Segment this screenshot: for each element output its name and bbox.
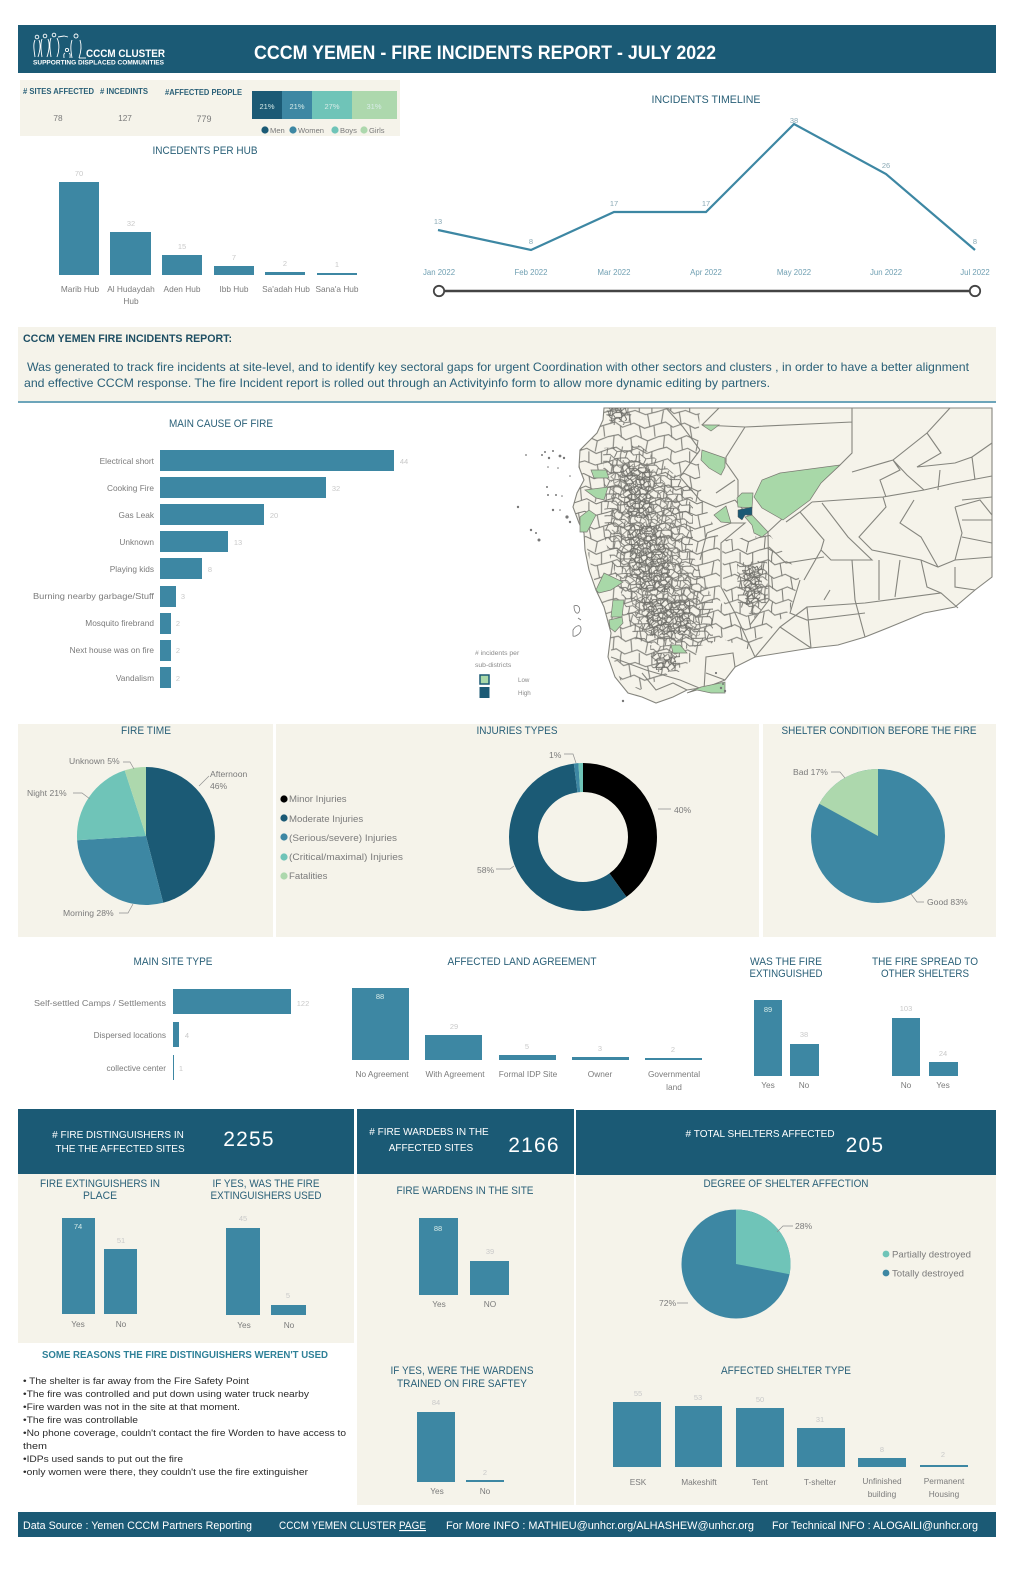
bar chart: affected land agreement: Owner	[588, 1069, 612, 1079]
dense western and central districts	[603, 408, 768, 672]
bar chart: affected shelter type: 53	[694, 1393, 702, 1402]
bar chart: main cause of fire: MAIN CAUSE OF FIRE	[169, 418, 273, 430]
panel: shelters affected	[576, 1110, 996, 1505]
KPI: incidents	[100, 87, 148, 123]
KPI: sites affected	[23, 87, 94, 123]
bar chart: incidents per hub: Sana'a Hub	[315, 284, 359, 294]
pie chart: degree of shelter affection: 72%	[659, 1298, 677, 1308]
bar chart: main cause of fire: Next house was on fire	[70, 645, 154, 655]
bar chart: wardens trained on fire safety: 2	[483, 1468, 487, 1477]
text block: reasons extinguishers were not used: •No phone coverage, couldn't contact the fire Worden to have access to	[23, 1428, 346, 1439]
line chart: incidents timeline: Jul 2022	[960, 268, 990, 277]
bar chart: affected land agreement: 3	[598, 1044, 602, 1053]
bar chart: affected land agreement: With Agreement	[425, 1069, 485, 1079]
bar chart: wardens trained on fire safety: No	[480, 1486, 491, 1496]
donut labels: 40%	[674, 805, 692, 815]
text block: reasons extinguishers were not used: •The fire was controlled and put down using water truck nearby	[23, 1389, 309, 1400]
bar chart: affected land agreement	[352, 956, 702, 1092]
bar chart: affected land agreement: 5	[525, 1042, 529, 1051]
KPI: incidents: # INCEDINTS	[100, 87, 148, 96]
KPI banner: fire extinguishers: 2255	[223, 1128, 275, 1151]
bar chart: incidents per hub: 2	[283, 259, 287, 268]
bar chart: affected shelter type: 55	[634, 1389, 642, 1398]
KPI banner: fire wardens	[357, 1109, 574, 1174]
bar chart: incidents per hub: INCEDENTS PER HUB	[152, 145, 258, 157]
map legend	[475, 650, 531, 698]
very dense highland core	[606, 408, 762, 670]
bar chart: main cause of fire: Playing kids	[110, 564, 154, 574]
bar chart: main cause of fire: 3	[181, 592, 185, 601]
bar chart: affected shelter type	[613, 1365, 968, 1499]
donut chart: injury types	[524, 778, 642, 896]
bar chart: fire extinguishers in place: Yes	[71, 1319, 85, 1329]
bar chart: affected shelter type: Unfinished	[862, 1476, 902, 1486]
bar chart: affected shelter type: Permanent	[924, 1476, 965, 1486]
bar chart: extinguishers used: 5	[286, 1291, 290, 1300]
KPI banner: fire extinguishers	[18, 1109, 354, 1174]
stacked bar: gender and age split: 27%	[324, 102, 340, 111]
KPI banner: fire wardens: AFFECTED SITES	[389, 1143, 474, 1154]
bar chart: incidents per hub: Sa'adah Hub	[262, 284, 310, 294]
bar chart: main cause of fire: 44	[400, 457, 408, 466]
KPI banner: total shelters affected	[576, 1110, 996, 1175]
map legend: High	[518, 690, 531, 697]
date range slider	[434, 286, 980, 296]
bar chart: main site type	[34, 956, 309, 1080]
bar chart: incidents per hub: 7	[232, 253, 236, 262]
text block: reasons extinguishers were not used: •IDPs used sands to put out the fire	[23, 1454, 183, 1465]
bar chart: extinguishers used: IF YES, WAS THE FIRE	[212, 1178, 320, 1190]
panel: shelter condition pie: SHELTER CONDITION BEFORE THE FIRE	[782, 725, 976, 737]
bar chart: fire wardens in the site	[396, 1185, 534, 1309]
bar chart: wardens trained on fire safety	[390, 1365, 534, 1496]
pie chart: shelter condition	[811, 769, 945, 903]
KPI: affected people: #AFFECTED PEOPLE	[165, 88, 242, 97]
bar chart: incidents per hub: 70	[75, 169, 83, 178]
legend: injury types: (Critical/maximal) Injuries	[289, 852, 403, 863]
legend: injury types: Minor Injuries	[289, 794, 347, 805]
pie chart: degree of shelter affection: DEGREE OF SHELTER AFFECTION	[704, 1178, 868, 1190]
legend: gender and age: Boys	[340, 126, 357, 135]
map legend: Low	[518, 677, 530, 684]
pie labels: Night 21%	[27, 788, 67, 798]
bar chart: main cause of fire: Vandalism	[116, 673, 154, 683]
line chart: incidents timeline: 38	[790, 116, 798, 125]
bar chart: affected land agreement: No Agreement	[355, 1069, 409, 1079]
high incidence sub-district	[738, 507, 752, 520]
map legend: # incidents per	[475, 650, 520, 657]
footer: CCCM YEMEN CLUSTER PAGE	[279, 1520, 426, 1532]
bar chart: extinguishers used: Yes	[237, 1320, 251, 1330]
bar chart: fire extinguishers in place: 51	[117, 1236, 125, 1245]
legend: injury types	[280, 794, 403, 882]
bar chart: fire extinguishers in place: No	[116, 1319, 127, 1329]
bar chart: was the fire extinguished: Yes	[761, 1080, 775, 1090]
bar chart: fire spread to other shelters: THE FIRE SPREAD TO	[872, 956, 978, 968]
bar chart: was the fire extinguished: No	[799, 1080, 810, 1090]
bar chart: incidents per hub	[59, 145, 359, 306]
KPI: incidents: 127	[118, 113, 132, 123]
panel: injuries types donut	[276, 724, 759, 937]
text block: reasons extinguishers were not used: •Fire warden was not in the site at that moment.	[23, 1402, 240, 1413]
legend: shelter affection: Totally destroyed	[892, 1268, 964, 1280]
bar chart: main site type: collective center	[106, 1063, 166, 1073]
bar chart: wardens trained on fire safety: Yes	[430, 1486, 444, 1496]
bar chart: extinguishers used	[210, 1178, 322, 1330]
bar chart: main site type: 4	[185, 1031, 189, 1040]
panel: key figures	[20, 80, 400, 136]
bar chart: affected land agreement: AFFECTED LAND AGREEMENT	[448, 956, 597, 968]
line chart: incidents timeline: May 2022	[777, 268, 811, 277]
bar chart: main cause of fire: Burning nearby garbage/Stuff	[33, 591, 155, 601]
bar chart: wardens trained on fire safety: IF YES, WERE THE WARDENS	[390, 1365, 534, 1377]
panel: fire time pie: FIRE TIME	[121, 725, 171, 737]
bar chart: main cause of fire: Gas Leak	[118, 510, 155, 520]
line chart: incidents timeline: 8	[529, 237, 533, 246]
second dense layer	[610, 460, 762, 645]
bar chart: main site type: 1	[179, 1064, 183, 1073]
bar chart: was the fire extinguished: 89	[764, 1005, 772, 1014]
bar chart: main site type: MAIN SITE TYPE	[134, 956, 212, 968]
bar chart: fire wardens in the site: FIRE WARDENS IN THE SITE	[396, 1185, 534, 1197]
bar chart: affected land agreement: 29	[450, 1022, 458, 1031]
bar chart: fire spread to other shelters: OTHER SHELTERS	[881, 968, 969, 980]
bar chart: fire spread to other shelters	[872, 956, 978, 1090]
line chart: incidents timeline: Apr 2022	[690, 268, 722, 277]
bar chart: incidents per hub: 15	[178, 242, 186, 251]
bar chart: incidents per hub: Marib Hub	[61, 284, 100, 294]
line chart: incidents timeline: 17	[610, 199, 618, 208]
text block: reasons extinguishers were not used: • The shelter is far away from the Fire Safety Point	[23, 1376, 249, 1387]
KPI: affected people: 779	[196, 114, 212, 124]
line chart: incidents timeline: 17	[702, 199, 710, 208]
bar chart: fire wardens in the site: 39	[486, 1247, 494, 1256]
bar chart: main cause of fire: Mosquito firebrand	[85, 618, 154, 628]
bar chart: affected shelter type: 2	[941, 1450, 945, 1459]
KPI banner: total shelters affected: # TOTAL SHELTERS AFFECTED	[685, 1129, 835, 1140]
bar chart: fire extinguishers in place	[40, 1178, 160, 1329]
district boundaries	[611, 408, 992, 690]
mid-density district network	[570, 408, 800, 690]
pie labels: Bad 17%	[793, 767, 828, 777]
pie chart: degree of shelter affection	[659, 1178, 868, 1318]
bar chart: extinguishers used: No	[284, 1320, 295, 1330]
bar chart: fire wardens in the site: NO	[484, 1299, 497, 1309]
description text: and effective CCCM response. The fire Incident report is rolled out through an Activityinfo form to allow more dynamic editing by partners.	[24, 376, 770, 390]
bar chart: affected land agreement: 88	[376, 992, 384, 1001]
bar chart: affected land agreement: land	[666, 1082, 682, 1092]
footer: For More INFO : MATHIEU@unhcr.org/ALHASHEW@unhcr.org	[446, 1520, 754, 1532]
low incidence sub-districts	[580, 425, 840, 693]
text block: reasons extinguishers were not used: •only women were there, they couldn't use the fire extinguisher	[23, 1467, 309, 1478]
bar chart: fire extinguishers in place: 74	[74, 1222, 82, 1231]
bar chart: affected shelter type: Housing	[929, 1489, 960, 1499]
bar chart: extinguishers used: EXTINGUISHERS USED	[210, 1190, 322, 1202]
donut labels: 58%	[477, 865, 495, 875]
bar chart: main cause of fire: 13	[234, 538, 242, 547]
bar chart: affected shelter type: 31	[816, 1415, 824, 1424]
map: incidents per sub-district	[475, 408, 992, 703]
bar chart: main site type: Dispersed locations	[94, 1030, 166, 1040]
pie chart: fire time	[77, 767, 215, 905]
bar chart: was the fire extinguished: WAS THE FIRE	[750, 956, 822, 968]
bar chart: wardens trained on fire safety: 84	[432, 1398, 440, 1407]
bar chart: fire extinguishers in place: PLACE	[83, 1190, 117, 1202]
KPI banner: total shelters affected: 205	[846, 1134, 884, 1157]
bar chart: fire wardens in the site: Yes	[432, 1299, 446, 1309]
bar chart: main cause of fire: 2	[176, 646, 180, 655]
bar chart: main cause of fire: 8	[208, 565, 212, 574]
legend: shelter affection: Partially destroyed	[892, 1250, 971, 1260]
legend: injury types: (Serious/severe) Injuries	[289, 833, 397, 844]
logo text: CCCM CLUSTER	[86, 48, 165, 60]
bar chart: fire spread to other shelters: No	[901, 1080, 912, 1090]
panel: report description	[18, 327, 996, 402]
bar chart: affected shelter type: T-shelter	[804, 1477, 836, 1487]
legend: shelter affection	[883, 1250, 971, 1280]
line chart: incidents timeline: Feb 2022	[515, 268, 547, 277]
footer	[18, 1512, 996, 1537]
bar chart: fire spread to other shelters: Yes	[936, 1080, 950, 1090]
line chart: incidents timeline	[423, 94, 990, 296]
KPI banner: fire wardens: # FIRE WARDEBS IN THE	[369, 1127, 489, 1138]
pie labels: Morning 28%	[63, 908, 114, 918]
bar chart: was the fire extinguished: 38	[800, 1030, 808, 1039]
pie labels: Afternoon	[210, 769, 247, 779]
text block: reasons extinguishers were not used: •The fire was controllable	[23, 1415, 138, 1426]
panel: injuries types donut: INJURIES TYPES	[476, 725, 558, 737]
text block: reasons extinguishers were not used: them	[23, 1441, 47, 1452]
line chart: incidents timeline: INCIDENTS TIMELINE	[652, 94, 760, 106]
pie labels	[27, 756, 247, 918]
KPI banner: fire extinguishers: # FIRE DISTINGUISHERS IN	[52, 1130, 184, 1141]
header banner	[18, 25, 996, 73]
KPI: sites affected: 78	[53, 113, 63, 123]
bar chart: fire extinguishers in place: FIRE EXTINGUISHERS IN	[40, 1178, 160, 1190]
bar chart: main cause of fire: 20	[270, 511, 278, 520]
bar chart: was the fire extinguished: EXTINGUISHED	[750, 968, 823, 980]
panel: shelter condition pie	[763, 724, 996, 937]
bar chart: main cause of fire: 32	[332, 484, 340, 493]
stacked bar: gender and age split: 21%	[259, 102, 275, 111]
line chart: incidents timeline: 13	[434, 217, 442, 226]
pie chart: degree of shelter affection: 28%	[795, 1221, 813, 1231]
panel: fire time pie	[18, 724, 273, 937]
legend: gender and age	[261, 126, 385, 135]
bar chart: main cause of fire: Cooking Fire	[107, 483, 154, 493]
bar chart: main site type: Self-settled Camps / Settlements	[34, 998, 166, 1008]
pie labels: Good 83%	[927, 897, 968, 907]
legend: gender and age: Girls	[369, 126, 385, 135]
bar chart: fire wardens in the site: 88	[434, 1224, 442, 1233]
description text: Was generated to track fire incidents at site-level, and to identify key sectoral gaps for urgent Coordination with other sectors and clusters , in order to have a better alignment	[27, 360, 970, 374]
bar chart: main site type: 122	[297, 999, 309, 1008]
pie labels: Unknown 5%	[69, 756, 120, 766]
bar chart: affected shelter type: Tent	[752, 1477, 769, 1487]
bar chart: affected shelter type: 50	[756, 1395, 764, 1404]
KPI: affected people	[165, 88, 242, 124]
icon: CCCM logo figures	[34, 33, 86, 58]
stacked bar: gender and age split: 21%	[289, 102, 305, 111]
bar chart: main cause of fire: Unknown	[119, 537, 154, 547]
bar chart: affected shelter type: AFFECTED SHELTER TYPE	[721, 1365, 851, 1377]
pie labels: 46%	[210, 781, 228, 791]
bar chart: fire spread to other shelters: 103	[900, 1004, 912, 1013]
bar chart: affected land agreement: Governmental	[648, 1069, 700, 1079]
bar chart: incidents per hub: Aden Hub	[164, 284, 201, 294]
line chart: incidents timeline: 26	[882, 161, 890, 170]
donut labels	[477, 750, 692, 875]
logo tagline: SUPPORTING DISPLACED COMMUNITIES	[33, 60, 165, 66]
line chart: incidents timeline: Jan 2022	[423, 268, 455, 277]
pie labels	[793, 767, 968, 907]
text block: reasons extinguishers were not used	[18, 1343, 354, 1512]
KPI: sites affected: # SITES AFFECTED	[23, 87, 94, 96]
bar chart: main cause of fire: 2	[176, 619, 180, 628]
bar chart: affected shelter type: building	[868, 1489, 897, 1499]
bar chart: affected land agreement: 2	[671, 1045, 675, 1054]
bar chart: extinguishers used: 45	[239, 1214, 247, 1223]
legend: gender and age: Women	[298, 126, 324, 135]
stacked bar: gender and age split	[252, 91, 397, 119]
legend: injury types: Fatalities	[289, 871, 328, 882]
land area	[573, 408, 992, 703]
bar chart: main cause of fire	[33, 418, 408, 688]
bar chart: incidents per hub: Al Hudaydah	[107, 284, 155, 294]
bar chart: incidents per hub: Hub	[123, 296, 139, 306]
KPI banner: fire extinguishers: THE THE AFFECTED SITES	[55, 1144, 185, 1155]
bar chart: incidents per hub: Ibb Hub	[219, 284, 249, 294]
bar chart: main cause of fire: 2	[176, 674, 180, 683]
bar chart: affected land agreement: Formal IDP Site	[499, 1069, 558, 1079]
legend: injury types: Moderate Injuries	[289, 814, 363, 825]
bar chart: wardens trained on fire safety: TRAINED ON FIRE SAFTEY	[397, 1378, 527, 1390]
bar chart: affected shelter type: Makeshift	[681, 1477, 717, 1487]
map legend: sub-districts	[475, 662, 512, 669]
bar chart: main cause of fire: Electrical short	[100, 456, 155, 466]
bar chart: incidents per hub: 32	[127, 219, 135, 228]
description text	[24, 360, 970, 390]
panel: fire wardens	[357, 1109, 574, 1505]
legend: gender and age: Men	[270, 126, 285, 135]
bar chart: was the fire extinguished	[750, 956, 823, 1090]
line chart: incidents timeline: Mar 2022	[598, 268, 630, 277]
footer: For Technical INFO : ALOGAILI@unhcr.org	[772, 1520, 978, 1532]
bar chart: fire spread to other shelters: 24	[939, 1049, 947, 1058]
panel: fire extinguishers	[18, 1109, 354, 1343]
bar chart: affected shelter type: ESK	[630, 1477, 647, 1487]
donut labels: 1%	[549, 750, 562, 760]
bar chart: affected shelter type: 8	[880, 1445, 884, 1454]
footer: Data Source : Yemen CCCM Partners Reporting	[23, 1520, 252, 1532]
description heading: CCCM YEMEN FIRE INCIDENTS REPORT:	[23, 333, 232, 345]
line chart: incidents timeline: 8	[973, 237, 977, 246]
line chart: incidents timeline: Jun 2022	[870, 268, 902, 277]
islands	[517, 450, 726, 702]
bar chart: incidents per hub: 1	[335, 260, 339, 269]
stacked bar: gender and age split: 31%	[366, 102, 382, 111]
text block: reasons extinguishers were not used: SOME REASONS THE FIRE DISTINGUISHERS WEREN'T USED	[42, 1350, 328, 1361]
KPI banner: fire wardens: 2166	[508, 1134, 560, 1157]
title: CCCM YEMEN - FIRE INCIDENTS REPORT - JULY 2022	[254, 42, 716, 64]
